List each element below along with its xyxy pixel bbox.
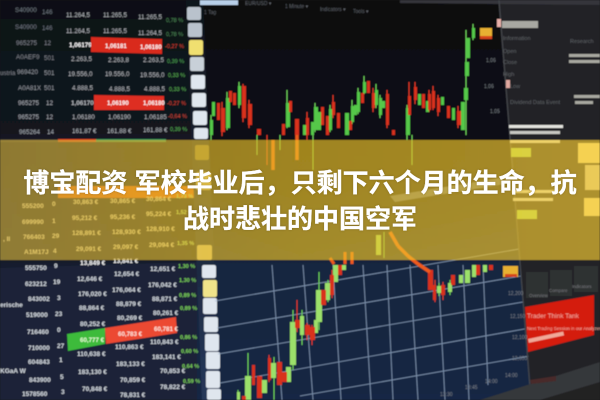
quote rows, upper table: S40900 [15,7,37,14]
quote rows, lower table: 88,879 € [116,301,142,308]
sidebar list text: Open [503,49,516,55]
quote rows, lower table: 3 [61,389,65,396]
quote rows, upper table: 11.265,5 [103,12,128,19]
bottom-right icon tiles [526,266,598,298]
quote rows, lower table: 519000 [26,312,48,319]
quote rows, lower table: 80,261 € [153,310,179,317]
table rows behind band: 128,891 € [72,230,101,237]
price axis labels: 13:30 [440,392,453,398]
green and red highlighted cells: 60,783 € [118,331,143,338]
table rows behind band: 1,35 % [177,241,194,247]
quote rows, upper table: 12 [46,100,54,107]
quote rows, lower table: 19 [53,279,61,286]
quote rows, upper table: 965275 [16,40,38,47]
quote rows, lower table: 23 [55,311,63,318]
green and red highlighted cells [67,317,179,351]
quote rows, lower table: 183,130 € [78,369,107,376]
quote rows, upper table: 0,39 % [170,127,187,133]
table rows behind band: 13,849 € [80,260,106,267]
bottom-right icon tiles: Overview [529,293,549,298]
quote rows, lower table: 78,831 € [120,392,146,399]
quote rows, lower table: 176,042 € [148,282,177,289]
quote rows, lower table: 70,848 € [82,386,108,393]
red quote cells [91,37,186,110]
quote rows, lower table [0,263,200,399]
price axis labels: 12,150 [510,314,526,320]
quote rows, lower table: 88,864 € [79,305,105,312]
quote rows, upper table: 4.888,5 [144,86,166,93]
quote rows, upper table: 2.263,5 [71,56,93,63]
chart header menu: Tools ▾ [353,9,369,15]
candlestick chart [210,24,493,400]
red quote cells: -0,27 % [167,101,186,107]
quote rows, lower table: 0,89 % [180,306,197,312]
chart header menu: 1 Minute ▾ [285,4,309,10]
red candles [217,81,493,400]
quote rows, upper table: A0A81X [18,85,42,92]
price axis labels: 13:45 [465,385,478,391]
table rows behind band: 29,094 € [149,242,175,249]
quote rows, upper table: 501 [44,55,55,62]
sidebar list text: Dividend Data Event [510,100,561,106]
faint chart strip in the band [390,178,505,202]
table rows behind band: 1,73 % [176,194,193,200]
quote rows, upper table: 2.263,5 [143,57,165,64]
table rows behind band: 95,236 € [110,214,136,221]
quote rows, upper table: 146 [42,25,53,32]
table rows behind band: 0 [52,201,56,208]
quote rows, lower table: 88,871 € [152,296,178,303]
monitor bezel corner [480,362,600,400]
table rows behind band: 1,52 % [176,210,193,216]
quote rows, lower table: 110,843 € [150,339,179,346]
quote rows, upper table: 161,88 € [143,127,168,134]
price axis labels [440,58,528,398]
quote rows, upper table: 969420 [17,69,39,76]
quote rows, upper table: ustria [0,70,16,77]
quote rows, upper table: 4.888,5 [72,85,94,92]
table rows behind band: 555200 [22,203,44,210]
quote rows, lower table: 1,30 % [179,278,196,284]
quote rows, upper table: 1,06180 [72,114,95,121]
sidebar list text [497,19,600,134]
quote rows, lower table: 843002 [28,296,50,303]
quote rows, lower table: 623212 [25,281,47,288]
quote rows, lower table: 0,60 % [181,349,198,355]
quote rows, upper table: 11.264,5 [138,30,163,37]
table rows behind band: 1 [52,218,56,225]
table rows behind band: 699990 [22,219,44,226]
quote rows, upper table: 1,06170 [71,100,94,107]
yellow translucent title band backdrop [0,140,600,260]
sidebar list text: Close [503,60,517,66]
red quote cells: 1,06180 [143,101,165,107]
quote rows, upper table: 146 [42,9,53,16]
red quote cells: -0,27 % [165,44,184,50]
quote rows, upper table: 11.265,5 [103,28,128,35]
quote rows, lower table: 12,646 € [77,276,103,283]
quote rows, upper table: 0,78 % [166,32,183,38]
quote rows, lower table: 9 [54,263,58,270]
sidebar list text: Information [503,36,531,42]
quote rows, lower table: 604843 [28,359,50,366]
quote rows, upper table: 19.556,0 [68,71,93,78]
current price marker [480,28,518,277]
green and red highlighted cells: 60,777 € [80,337,105,344]
chart header menu [200,0,369,16]
quote rows, upper table: 2.263,8 [108,57,130,64]
red news box: Next Trading Session in our Analyzer [527,326,600,331]
red news box [525,295,600,352]
quote rows, lower table: 0 [57,327,61,334]
quote rows, upper table: A0AEF9 [16,54,40,61]
quote rows, lower table: 0,86 % [180,335,197,341]
quote rows, lower table: 1 [59,357,63,364]
quote rows, upper table: 14 [47,129,55,136]
quote rows, upper table [0,7,187,136]
table rows behind band: 30,863 € [73,199,99,206]
quote rows, lower table: 176,020 € [78,291,107,298]
title: 战时悲壮的中国空军 [183,204,417,234]
quote rows, lower table: 110,638 € [77,351,106,358]
quote rows, lower table: 70,853 € [160,368,186,375]
table rows behind band: 30,865 € [110,198,136,205]
quote rows, lower table: 0,89 % [179,293,196,299]
quote rows, lower table: 555750 [25,265,47,272]
table rows behind band: 29,091 € [76,246,102,253]
price axis labels: 1,06 [484,84,494,90]
table rows behind band: , II [3,236,10,243]
green and red highlighted cells: 60,781 € [154,326,179,333]
red quote cells: 1,06180 [140,45,162,51]
quote rows, upper table: 11.264,5 [66,28,91,35]
table rows behind band: A1M17J [24,249,49,256]
quote rows, lower table: 80,252 € [80,321,106,328]
quote rows, upper table: 11.264,5 [66,12,91,19]
quote rows, upper table: 0,39 % [167,59,184,65]
quote rows, upper table: 965275 [18,100,40,107]
red quote cells: 1,06181 [105,44,127,50]
quote rows, upper table: S40900 [15,24,37,31]
price axis labels: 1,05 [490,109,500,115]
table rows behind band: 95,212 € [72,215,98,222]
quote rows, upper table: 501 [44,70,55,77]
red news box: Trader Think Tank [527,313,580,320]
quote rows, upper table: 1,06185 [144,114,167,121]
bottom-right icon tiles: Compare [549,288,568,293]
quote rows, upper table: 19.556,0 [140,72,165,79]
quote rows, upper table: 4.888,5 [109,86,131,93]
quote rows, lower table: 12,654 € [114,271,140,278]
price axis labels: 14:00 [485,379,498,385]
quote rows, upper table: 1,06190 [108,114,131,121]
price axis labels: 1,06 [486,58,496,64]
table rows behind band: 13,841 € [113,258,139,265]
quote rows, lower table: 0,59 % [183,379,200,385]
table rows behind band: 95,224 € [146,211,172,218]
quote rows, upper table: 11.265,5 [138,14,163,21]
quote rows, upper table: 965275 [18,114,40,121]
quote rows, upper table: 1,06179 [69,42,92,49]
quote rows, upper table: 161,87 € [72,128,97,135]
quote rows, lower table: 1578560 [22,391,48,398]
quote rows, lower table: 176,064 € [112,287,141,294]
quote rows, lower table: 80,269 € [117,315,143,322]
table rows behind band: 128,930 € [112,229,141,236]
quote rows, lower table: 3 [57,295,61,302]
quote rows, upper table: 0,78 % [166,18,183,24]
chart grid lines [215,248,530,400]
red quote cells: 1,06190 [107,101,129,107]
quote rows, upper table: 501 [44,85,55,92]
quote rows, upper table: 965264 [19,129,41,136]
wicks [211,24,473,400]
quote rows, lower table: 843900 [29,377,51,384]
quote rows, lower table: 27 [57,343,65,350]
title: 博宝配资 军校毕业后，只剩下六个月的生命，抗 [23,168,577,198]
quote rows, lower table: 1,30 % [178,264,195,270]
quote rows, upper table: 19.556,0 [105,71,130,78]
quote rows, lower table: 110,863 € [115,344,144,351]
quote rows, upper table: 12 [44,40,52,47]
table rows behind band: 29,097 € [113,244,139,251]
table rows behind band: 766403 [23,234,45,241]
chart header menu: EUR/USD ▾ [245,1,272,7]
table rows behind band: 29 [52,233,60,240]
price axis labels: 12,050 [512,356,528,362]
quote rows, lower table: 183,141 € [152,354,181,361]
table rows behind band: 4 [53,248,57,255]
panel: right sidebar [400,0,600,400]
quote rows, lower table: KGaA W [0,368,27,375]
quote rows, upper table: 0,33 % [169,87,186,93]
price axis labels: 14:00 [505,373,518,379]
quote rows, upper table: -0,64 % [168,114,187,120]
quote rows, lower table: 0,64 % [182,364,199,370]
quote rows, lower table: erische [0,302,23,309]
quote rows, lower table: 78,822 € [160,384,186,391]
bottom-right icon tiles: Indicators [572,284,592,289]
price axis labels: 12,200 [508,291,524,297]
panel: chart toolbar [186,0,221,400]
quote rows, upper table: 161,88 € [107,128,132,135]
chart header menu: 1 Tag [204,10,216,16]
table rows behind band: 128,910 € [146,226,175,233]
panel: quote table [0,0,208,400]
sidebar list text: Research [570,39,594,45]
quote rows, lower table: 5 [60,374,64,381]
quote rows, lower table: 183,133 € [116,361,145,368]
quote rows, upper table: 12 [46,114,54,121]
sidebar list text: Low [510,84,520,90]
quote rows, upper table: 0,33 % [168,73,185,79]
sidebar news items behind band [510,140,600,219]
quote rows, lower table: 710000 [28,345,50,352]
quote rows, lower table: 716460 [27,329,49,336]
table rows behind band [0,139,208,267]
table rows behind band: 30,864 € [146,196,172,203]
chart header menu: Indicators ▾ [320,7,346,13]
green candles [210,28,475,135]
quote rows, lower table: 12,651 € [150,266,176,273]
title [23,168,577,234]
quote rows, lower table: 70,859 € [120,377,146,384]
price axis labels: 12,100 [512,335,528,341]
sidebar list text: High [503,72,514,78]
